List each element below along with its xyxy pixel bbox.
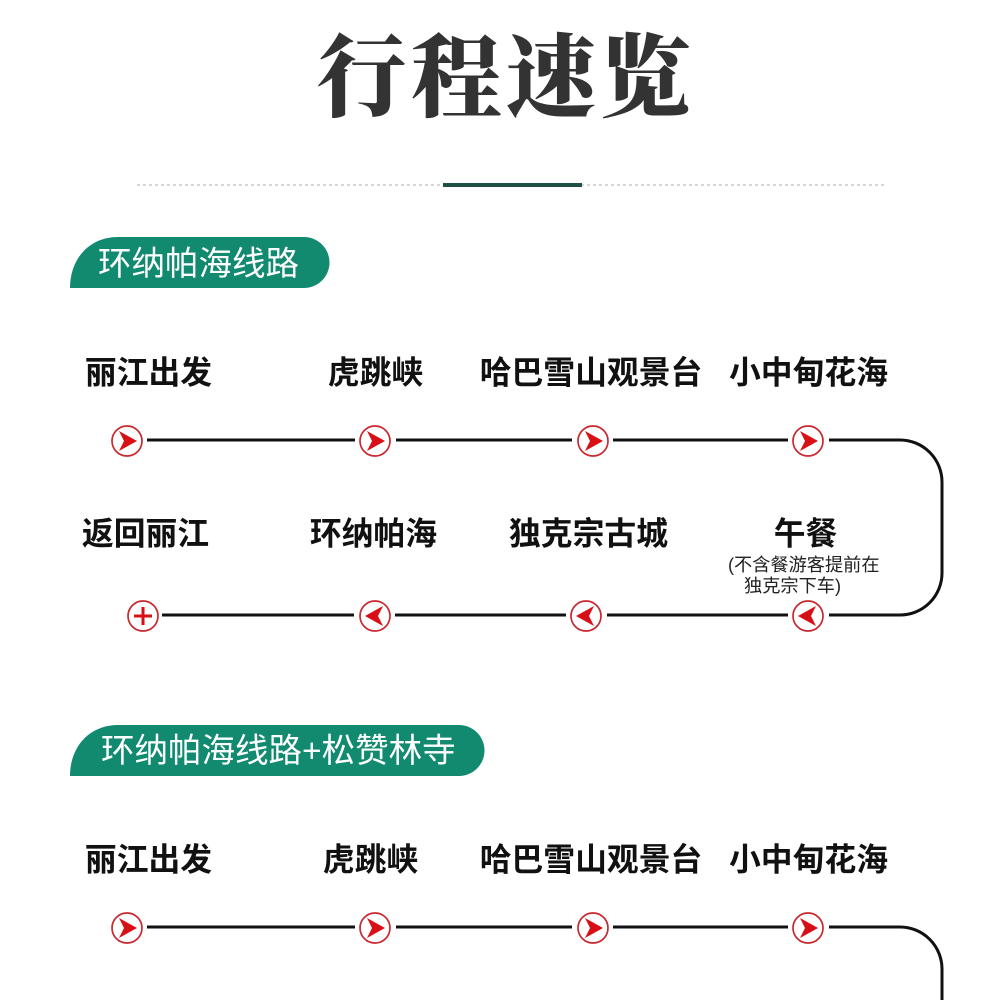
route one connector lines (147, 440, 942, 615)
route two connector lines (147, 927, 942, 1000)
stop: 环纳帕海: 环纳帕海 (310, 516, 437, 552)
stop: 虎跳峡 (323, 842, 418, 943)
stop: 独克宗古城: 独克宗古城 (509, 516, 668, 552)
stop: 小中甸花海 (729, 354, 888, 456)
stop: 丽江出发: 丽江出发 (85, 354, 212, 390)
section heading: 环纳帕海线路+松赞林寺: 环纳帕海线路+松赞林寺 (101, 733, 456, 770)
stop: 小中甸花海: 小中甸花海 (729, 842, 888, 878)
stop: 哈巴雪山观景台 (480, 842, 702, 943)
note: lunch: 独克宗下车) (744, 576, 841, 596)
section heading: 环纳帕海线路 (70, 237, 330, 288)
stop: 丽江出发 (85, 842, 212, 943)
stop: 丽江出发 (85, 354, 212, 456)
section heading: 环纳帕海线路+松赞林寺 (70, 725, 484, 776)
stop: 返回丽江: 返回丽江 (82, 516, 209, 552)
stop: 独克宗古城 (509, 516, 668, 631)
note: lunch (728, 555, 880, 596)
stop: 环纳帕海 (310, 516, 437, 631)
stop: 虎跳峡 (328, 354, 423, 456)
stop: 哈巴雪山观景台: 哈巴雪山观景台 (480, 842, 702, 878)
route one (82, 354, 942, 631)
stop: 哈巴雪山观景台 (480, 354, 702, 456)
stop: 小中甸花海 (729, 842, 888, 943)
note: lunch: (不含餐游客提前在 (728, 555, 880, 575)
stop: 虎跳峡: 虎跳峡 (328, 354, 423, 390)
stop: 丽江出发: 丽江出发 (85, 842, 212, 878)
route two (85, 842, 942, 1000)
title: 行程速览 (317, 30, 695, 129)
stop: 返回丽江 (82, 516, 209, 631)
section heading: 环纳帕海线路: 环纳帕海线路 (98, 246, 299, 283)
stop: 哈巴雪山观景台: 哈巴雪山观景台 (480, 354, 702, 390)
stop: 午餐 (774, 516, 837, 631)
stop: 虎跳峡: 虎跳峡 (323, 842, 418, 878)
title divider (137, 183, 886, 187)
stop: 小中甸花海: 小中甸花海 (729, 354, 888, 390)
stop: 午餐: 午餐 (774, 516, 837, 552)
